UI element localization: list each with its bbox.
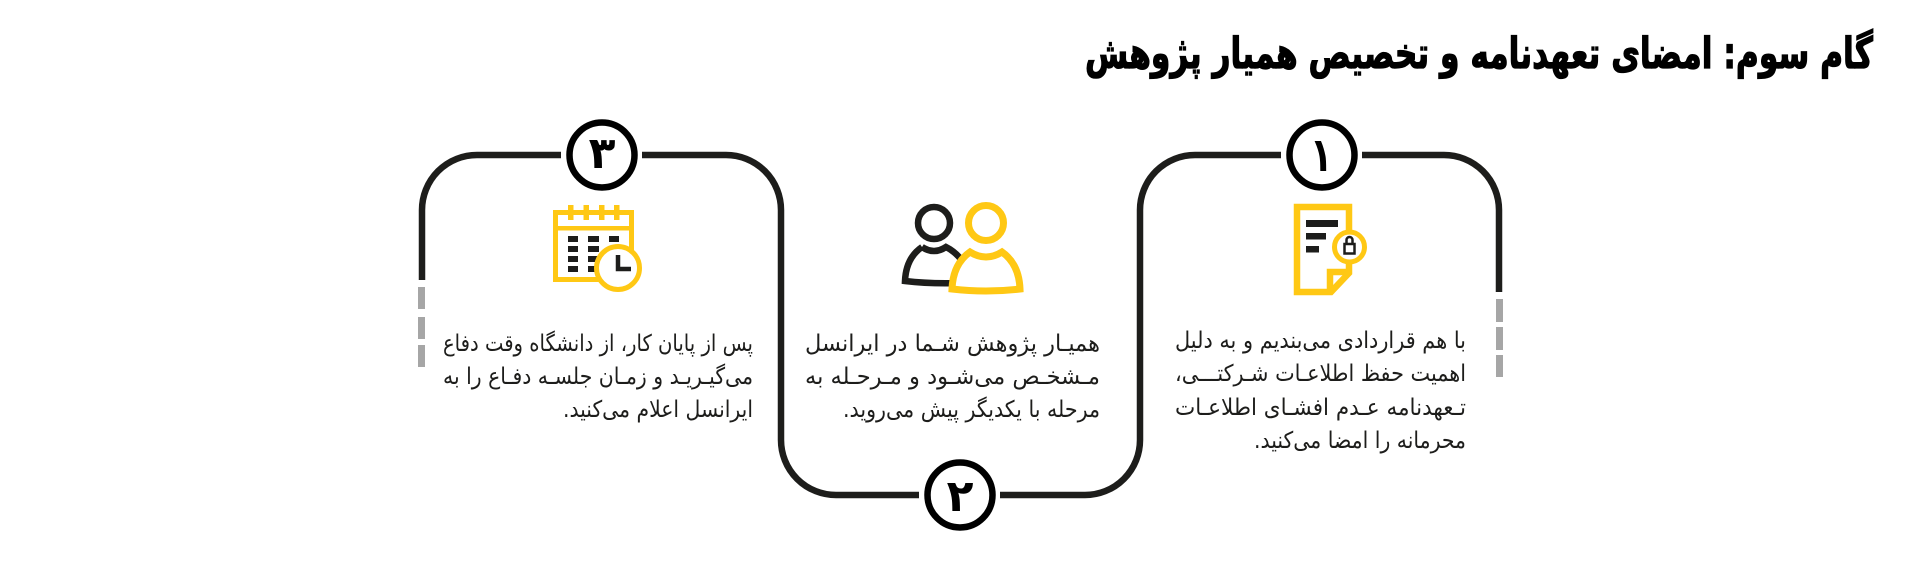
- connector: step 1 right arm: [1362, 155, 1499, 292]
- text: step 3 description: می‌گیـریـد و زمـان جلسـه دفـاع را به: [443, 363, 753, 390]
- text: step 2 description: همیـار پژوهش شـما در ایرانسل: [805, 331, 1100, 357]
- text: step 1 description: [1175, 328, 1466, 454]
- connector: step 3 left arm: [422, 155, 561, 280]
- text: step 2 description: [805, 331, 1100, 423]
- step 1 number badge: [1290, 122, 1354, 188]
- text: step 1 description: با هم قراردادی می‌بندیم و به دلیل: [1175, 328, 1466, 354]
- text: step 1 description: اهمیت حفظ اطلاعـات شـرکتـــی،: [1175, 361, 1466, 387]
- dashes: right end: [1496, 299, 1503, 377]
- step 2 number badge: ۲: [947, 471, 974, 522]
- icon: two people: [905, 206, 1020, 291]
- dashes: left end: [418, 287, 425, 367]
- text: step 1 description: تـعهدنامه عـدم افشـای اطلاعـات: [1175, 395, 1466, 421]
- text: step 1 description: محرمانه را امضا می‌کنید.: [1254, 428, 1466, 454]
- text: step 2 description: مرحله با یکدیگر پیش می‌روید.: [843, 396, 1100, 423]
- connector: step 2 and 3 path: [642, 155, 919, 495]
- text: step 3 description: [443, 330, 753, 423]
- step 3 number badge: [570, 122, 634, 188]
- text: step 3 description: ایرانسل اعلام می‌کنید.: [563, 397, 753, 423]
- icon: calendar with clock: [555, 205, 640, 290]
- text: step 2 description: مـشخـص می‌شـود و مـرحـله به: [805, 364, 1100, 390]
- step 1 number badge: ۱: [1310, 130, 1334, 181]
- connector: step 1 and 2 path: [1000, 155, 1281, 495]
- step 3 number badge: ۳: [589, 128, 616, 179]
- step 2 number badge: [928, 462, 992, 528]
- text: step 3 description: پس از پایان کار، از دانشگاه وقت دفاع: [443, 330, 753, 357]
- icon: locked document: [1297, 207, 1364, 292]
